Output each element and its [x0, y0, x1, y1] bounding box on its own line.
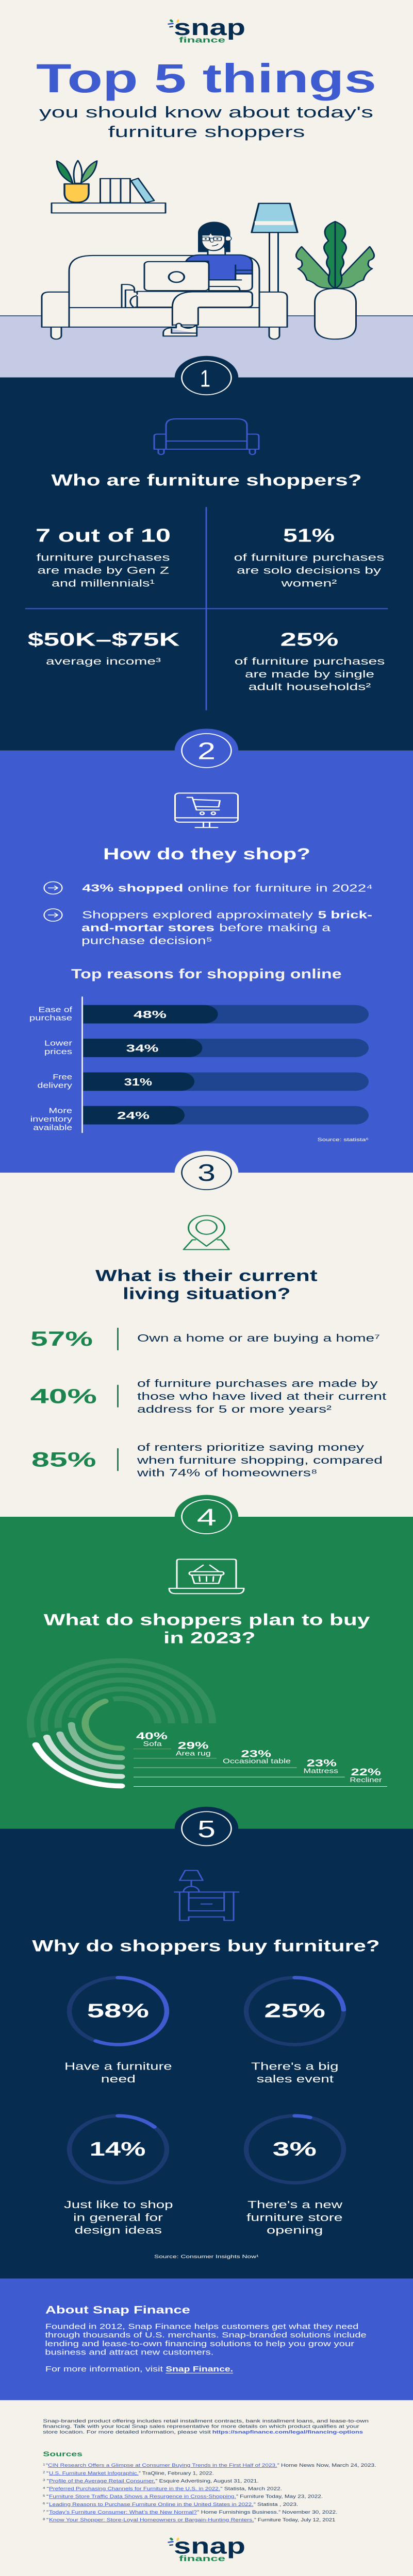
neck [208, 248, 225, 255]
more information line: For more information, visit [45, 2365, 163, 2374]
ring: 14% design ideas: 14% [90, 2139, 145, 2160]
source 4: 4 [43, 2487, 45, 2489]
stat: income: $50K–$75K [28, 630, 179, 650]
stat: 51% [234, 526, 384, 589]
bar: ease of purchase 48%: 48% [134, 1009, 167, 1021]
panel: who are furniture shoppers [0, 356, 413, 751]
source 3: 3 [43, 2479, 45, 2482]
subtitle: furniture shoppers [108, 124, 305, 141]
panel: what do shoppers plan to buy [0, 1495, 413, 1828]
stat: 57% own a home [30, 1327, 380, 1350]
stat: 7 out of 10: furniture purchases [37, 552, 170, 563]
number badge 2: 2 [197, 738, 216, 765]
source 2: U.S. Furniture Market Infographic. [49, 2471, 139, 2476]
stat: 51%: 51% [283, 526, 335, 546]
ring: 3% new store opening: furniture store [246, 2212, 343, 2224]
ring: 14% design ideas [64, 2116, 173, 2236]
bullet: 43% shopped: online for furniture in 2022⁴ [188, 883, 373, 894]
chart arcs [36, 1701, 122, 1786]
source 6: “ [46, 2502, 49, 2507]
ring: 58% have a furniture need [64, 1978, 172, 2085]
source 6: 6 [43, 2502, 45, 2505]
ring: 3% new store opening: 3% [273, 2139, 317, 2160]
ring: 3% new store opening: There's a new [247, 2199, 343, 2211]
source note: Source: Consumer Insights Now¹ [154, 2255, 259, 2259]
bar: more inventory available 24%: available [33, 1124, 72, 1132]
logo: snap finance footer: snap [174, 2533, 245, 2558]
stat: 25%: 25% [280, 630, 339, 650]
heading: About Snap Finance [45, 2303, 190, 2316]
floor lamp [252, 204, 298, 293]
stat: 25%: of furniture purchases [235, 656, 385, 667]
stat: income [28, 630, 179, 667]
source 3: Profile of the Average Retail Consumer. [49, 2479, 155, 2484]
floor [0, 316, 413, 378]
ring: 3% new store opening: opening [267, 2225, 323, 2236]
source 8: Know Your Shopper: Store-Loyal Homeowners or Bargain-Hunting Renters. [49, 2518, 254, 2522]
stat: 57% own a home: 57% [30, 1327, 93, 1350]
panel: how do they shop [0, 728, 413, 1173]
stat: 40%: those who have lived at their current [137, 1391, 387, 1402]
source 4: “ [47, 2486, 49, 2492]
heading: Why do shoppers buy furniture? [32, 1937, 380, 1955]
heading: What do shoppers plan to buy [44, 1611, 370, 1629]
disclaimer: Snap-branded product offering includes retail installment contracts, bank installment loans, and lease-to-own [43, 2419, 369, 2424]
source 2 [43, 2471, 214, 2476]
stat: 85% [31, 1442, 383, 1479]
person on sofa with laptop [122, 222, 252, 336]
panel: why do shoppers buy furniture [0, 1807, 413, 2279]
source 7 [43, 2510, 337, 2515]
panel: hero [0, 0, 413, 378]
about text: through thousands of U.S. merchants. Snap-branded solutions include [45, 2331, 367, 2340]
stat: 51%: of furniture purchases [234, 552, 384, 563]
bar: more inventory available 24%: More [48, 1107, 72, 1115]
sofa [42, 256, 287, 339]
panel: footer [0, 2400, 413, 2576]
stat: 7 out of 10: are made by Gen Z [37, 565, 169, 576]
stat: 51%: women² [280, 578, 337, 589]
bar: ease of purchase 48% [29, 1005, 369, 1024]
near leg [172, 292, 252, 326]
about text: Founded in 2012, Snap Finance helps customers get what they need [45, 2323, 358, 2331]
label: area rug 29% [134, 1740, 217, 1758]
ring: 25% big sales event [246, 1978, 343, 2085]
bar: more inventory available 24%: inventory [30, 1115, 72, 1123]
potted plant [296, 222, 374, 339]
icon: sofa [154, 419, 259, 454]
bar: lower prices 34%: prices [44, 1047, 72, 1056]
label: sofa 40%: Sofa [143, 1740, 162, 1748]
number badge 1 [175, 356, 238, 400]
source 7: “ [46, 2510, 49, 2515]
shoe [163, 324, 197, 336]
source 1: ” Home News Now, March 24, 2023. [277, 2463, 376, 2468]
stat: 7 out of 10 [36, 526, 171, 589]
label: recliner 22%: Recliner [350, 1776, 382, 1784]
radial bar chart: furniture purchase plans [30, 1660, 387, 1786]
ring: 58% have a furniture need: need [101, 2074, 136, 2085]
ring: 58% have a furniture need: Have a furniture [64, 2061, 172, 2072]
source 5: “ [46, 2494, 49, 2499]
bar: ease of purchase 48%: purchase [29, 1014, 72, 1022]
bar: free delivery 31%: Free [53, 1073, 72, 1081]
number badge 5 [175, 1807, 238, 1851]
bullet: brick-and-mortar: purchase decision⁵ [81, 935, 212, 946]
panel: current living situation [0, 1151, 413, 1517]
number badge 1: 1 [200, 365, 210, 392]
bullet: 43% shopped: 43% shopped [82, 883, 183, 894]
illustration: living room [0, 161, 413, 378]
label: sofa 40% [134, 1731, 171, 1749]
source 7: 7 [43, 2510, 45, 2513]
stat: 7 out of 10: and millennials¹ [52, 578, 155, 589]
source 5: ” Furniture Today, May 23, 2022. [236, 2494, 323, 2499]
hair [198, 222, 230, 252]
subheading: top reasons: Top reasons for shopping online [71, 967, 342, 981]
label: area rug 29%: Area rug [176, 1750, 211, 1757]
label: occasional table 23% [134, 1749, 297, 1768]
disclaimer: store location. For more detailed information, please visit [43, 2430, 211, 2435]
heading: in 2023? [163, 1629, 256, 1647]
heading [44, 1611, 370, 1647]
source 5: Furniture Store Traffic Data Shows a Resurgence in Cross-Shopping. [49, 2494, 236, 2499]
source 6: Leading Reasons to Purchase Furniture Online in the United States in 2022. [49, 2502, 253, 2507]
source note: Source: statista⁶ [318, 1137, 369, 1142]
ring: 3% new store opening [246, 2116, 343, 2236]
source 1: “ [46, 2463, 48, 2468]
icon: laptop with basket [169, 1560, 244, 1594]
bullet: 43% shopped [44, 882, 373, 894]
more information line: Snap Finance. [166, 2365, 233, 2374]
bullet: brick-and-mortar [44, 909, 372, 946]
stat: 85%: with 74% of homeowners⁸ [137, 1467, 318, 1479]
label: mattress 23% [134, 1758, 345, 1777]
stat: 85%: when furniture shopping, compared [137, 1454, 383, 1466]
bullet: brick-and-mortar: and-mortar stores [81, 922, 214, 934]
disclaimer [43, 2419, 369, 2435]
source 8: 8 [43, 2518, 45, 2521]
label: occasional table 23%: 23% [241, 1749, 271, 1759]
stat: 40%: address for 5 or more years² [137, 1403, 332, 1415]
bar: ease of purchase 48%: Ease of [38, 1005, 73, 1014]
label: area rug 29%: 29% [178, 1740, 209, 1751]
source 1: CIN Research Offers a Glimpse at Consumer Buying Trends in the First Half of 2023. [48, 2463, 277, 2468]
icon: lamp on nightstand [174, 1870, 239, 1920]
ring: 25% big sales event: sales event [257, 2074, 334, 2085]
bar: lower prices 34%: 34% [126, 1043, 159, 1054]
stat: 85%: 85% [31, 1448, 96, 1471]
source 3: “ [47, 2479, 49, 2484]
label: mattress 23%: 23% [307, 1758, 337, 1769]
number badge 4 [175, 1495, 238, 1539]
bar chart: top reasons for shopping online [29, 997, 369, 1132]
stat: 25% [235, 630, 385, 692]
stat: 57% own a home: Own a home or are buying a home⁷ [137, 1333, 380, 1344]
title: Top 5 things [36, 56, 376, 101]
sources list [43, 2463, 376, 2522]
heading: What is their current [95, 1267, 318, 1285]
number badge 5: 5 [197, 1816, 216, 1843]
source 2: “ [46, 2471, 49, 2476]
source 4: ” Statista, March 2022. [221, 2486, 282, 2492]
bar: more inventory available 24% [30, 1106, 369, 1132]
bullet: brick-and-mortar: Shoppers explored approximately [82, 909, 313, 921]
label: recliner 22%: 22% [351, 1767, 381, 1778]
bar: lower prices 34% [44, 1039, 369, 1057]
logo: snap finance: snap [174, 14, 245, 40]
ring: 58% have a furniture need: 58% [87, 2000, 149, 2022]
source 8: “ [46, 2518, 49, 2522]
subtitle: you should know about today's [39, 104, 373, 121]
bar: lower prices 34%: Lower [44, 1039, 72, 1047]
ring: 14% design ideas: Just like to shop [64, 2199, 173, 2211]
source 6: ” Statista , 2023. [254, 2502, 298, 2507]
shirt and arm [186, 255, 252, 291]
source 7: ” Home Furnishings Business.” November 30, 2022. [197, 2510, 337, 2515]
source 1: 1 [43, 2463, 45, 2466]
sources heading: Sources [43, 2450, 82, 2458]
stat grid [26, 507, 387, 710]
source 8: ” Furniture Today, July 12, 2021 [254, 2518, 335, 2522]
disclaimer: https://snapfinance.com/legal/financing-options [212, 2430, 363, 2435]
face [202, 232, 232, 250]
source 7: Today’s Furniture Consumer: What’s the New Normal? [49, 2510, 197, 2515]
source 4: Preferred Purchasing Channels for Furniture in the U.S. in 2022. [49, 2486, 220, 2492]
source 2: ” TraQline, February 1, 2022. [139, 2471, 214, 2476]
about text: lending and lease-to-own financing solutions to help you grow your [45, 2340, 354, 2348]
heading: Who are furniture shoppers? [52, 471, 362, 489]
disclaimer: financing. Talk with your local Snap sales representative for more details on which product qualifies at your [43, 2424, 359, 2429]
stat: 25%: adult households² [249, 682, 371, 692]
laptop [144, 262, 209, 291]
more information line [45, 2365, 233, 2374]
icon: monitor with cart [175, 793, 238, 827]
ring: 14% design ideas: design ideas [75, 2225, 162, 2236]
heading: How do they shop? [103, 845, 310, 863]
stat: 85%: of renters prioritize saving money [137, 1442, 365, 1453]
about text: business and attract new customers. [45, 2348, 213, 2357]
stat: 40%: of furniture purchases are made by [137, 1378, 378, 1389]
object beside leg [122, 284, 141, 307]
panel: about snap finance [0, 2279, 413, 2400]
stat: 51%: are solo decisions by [237, 565, 381, 576]
number badge 3 [175, 1151, 238, 1195]
logo: snap finance: finance [179, 36, 225, 45]
label: sofa 40%: 40% [136, 1731, 168, 1742]
source 3: ” Esquire Advertising, August 31, 2021. [156, 2479, 259, 2484]
bar: free delivery 31%: 31% [124, 1076, 152, 1088]
subtitle [39, 104, 373, 141]
stat: 7 out of 10: 7 out of 10 [36, 526, 171, 546]
stat: 25%: are made by single [245, 669, 374, 680]
bullet: brick-and-mortar: 5 brick- [318, 909, 372, 921]
about text [45, 2323, 367, 2357]
heading [95, 1267, 318, 1303]
label: recliner 22% [134, 1767, 387, 1786]
ring: 14% design ideas: in general for [73, 2212, 163, 2224]
ring: 25% big sales event: 25% [264, 2000, 325, 2022]
bar: free delivery 31% [37, 1072, 369, 1091]
ring: 25% big sales event: There's a big [251, 2061, 338, 2072]
shelf with plant and books [52, 161, 166, 213]
stat: 40% [30, 1378, 387, 1415]
source 5: 5 [43, 2495, 45, 2498]
number badge 4: 4 [197, 1504, 217, 1531]
icon: map pin [184, 1215, 229, 1249]
far leg [135, 292, 252, 307]
number badge 3: 3 [197, 1159, 216, 1186]
source 3 [43, 2479, 259, 2484]
stat: 40%: 40% [30, 1384, 97, 1408]
chart tracks [30, 1660, 212, 1737]
bar: free delivery 31%: delivery [37, 1081, 72, 1090]
label: mattress 23%: Mattress [303, 1767, 338, 1775]
logo: snap finance footer: finance [179, 2554, 225, 2563]
heading: living situation? [123, 1284, 291, 1303]
bar: more inventory available 24%: 24% [117, 1110, 150, 1122]
stat: income: average income³ [46, 656, 161, 667]
source 2: 2 [43, 2471, 45, 2474]
bullet: brick-and-mortar: before making a [219, 922, 331, 934]
label: occasional table 23%: Occasional table [223, 1758, 291, 1765]
number badge 2 [175, 728, 238, 772]
